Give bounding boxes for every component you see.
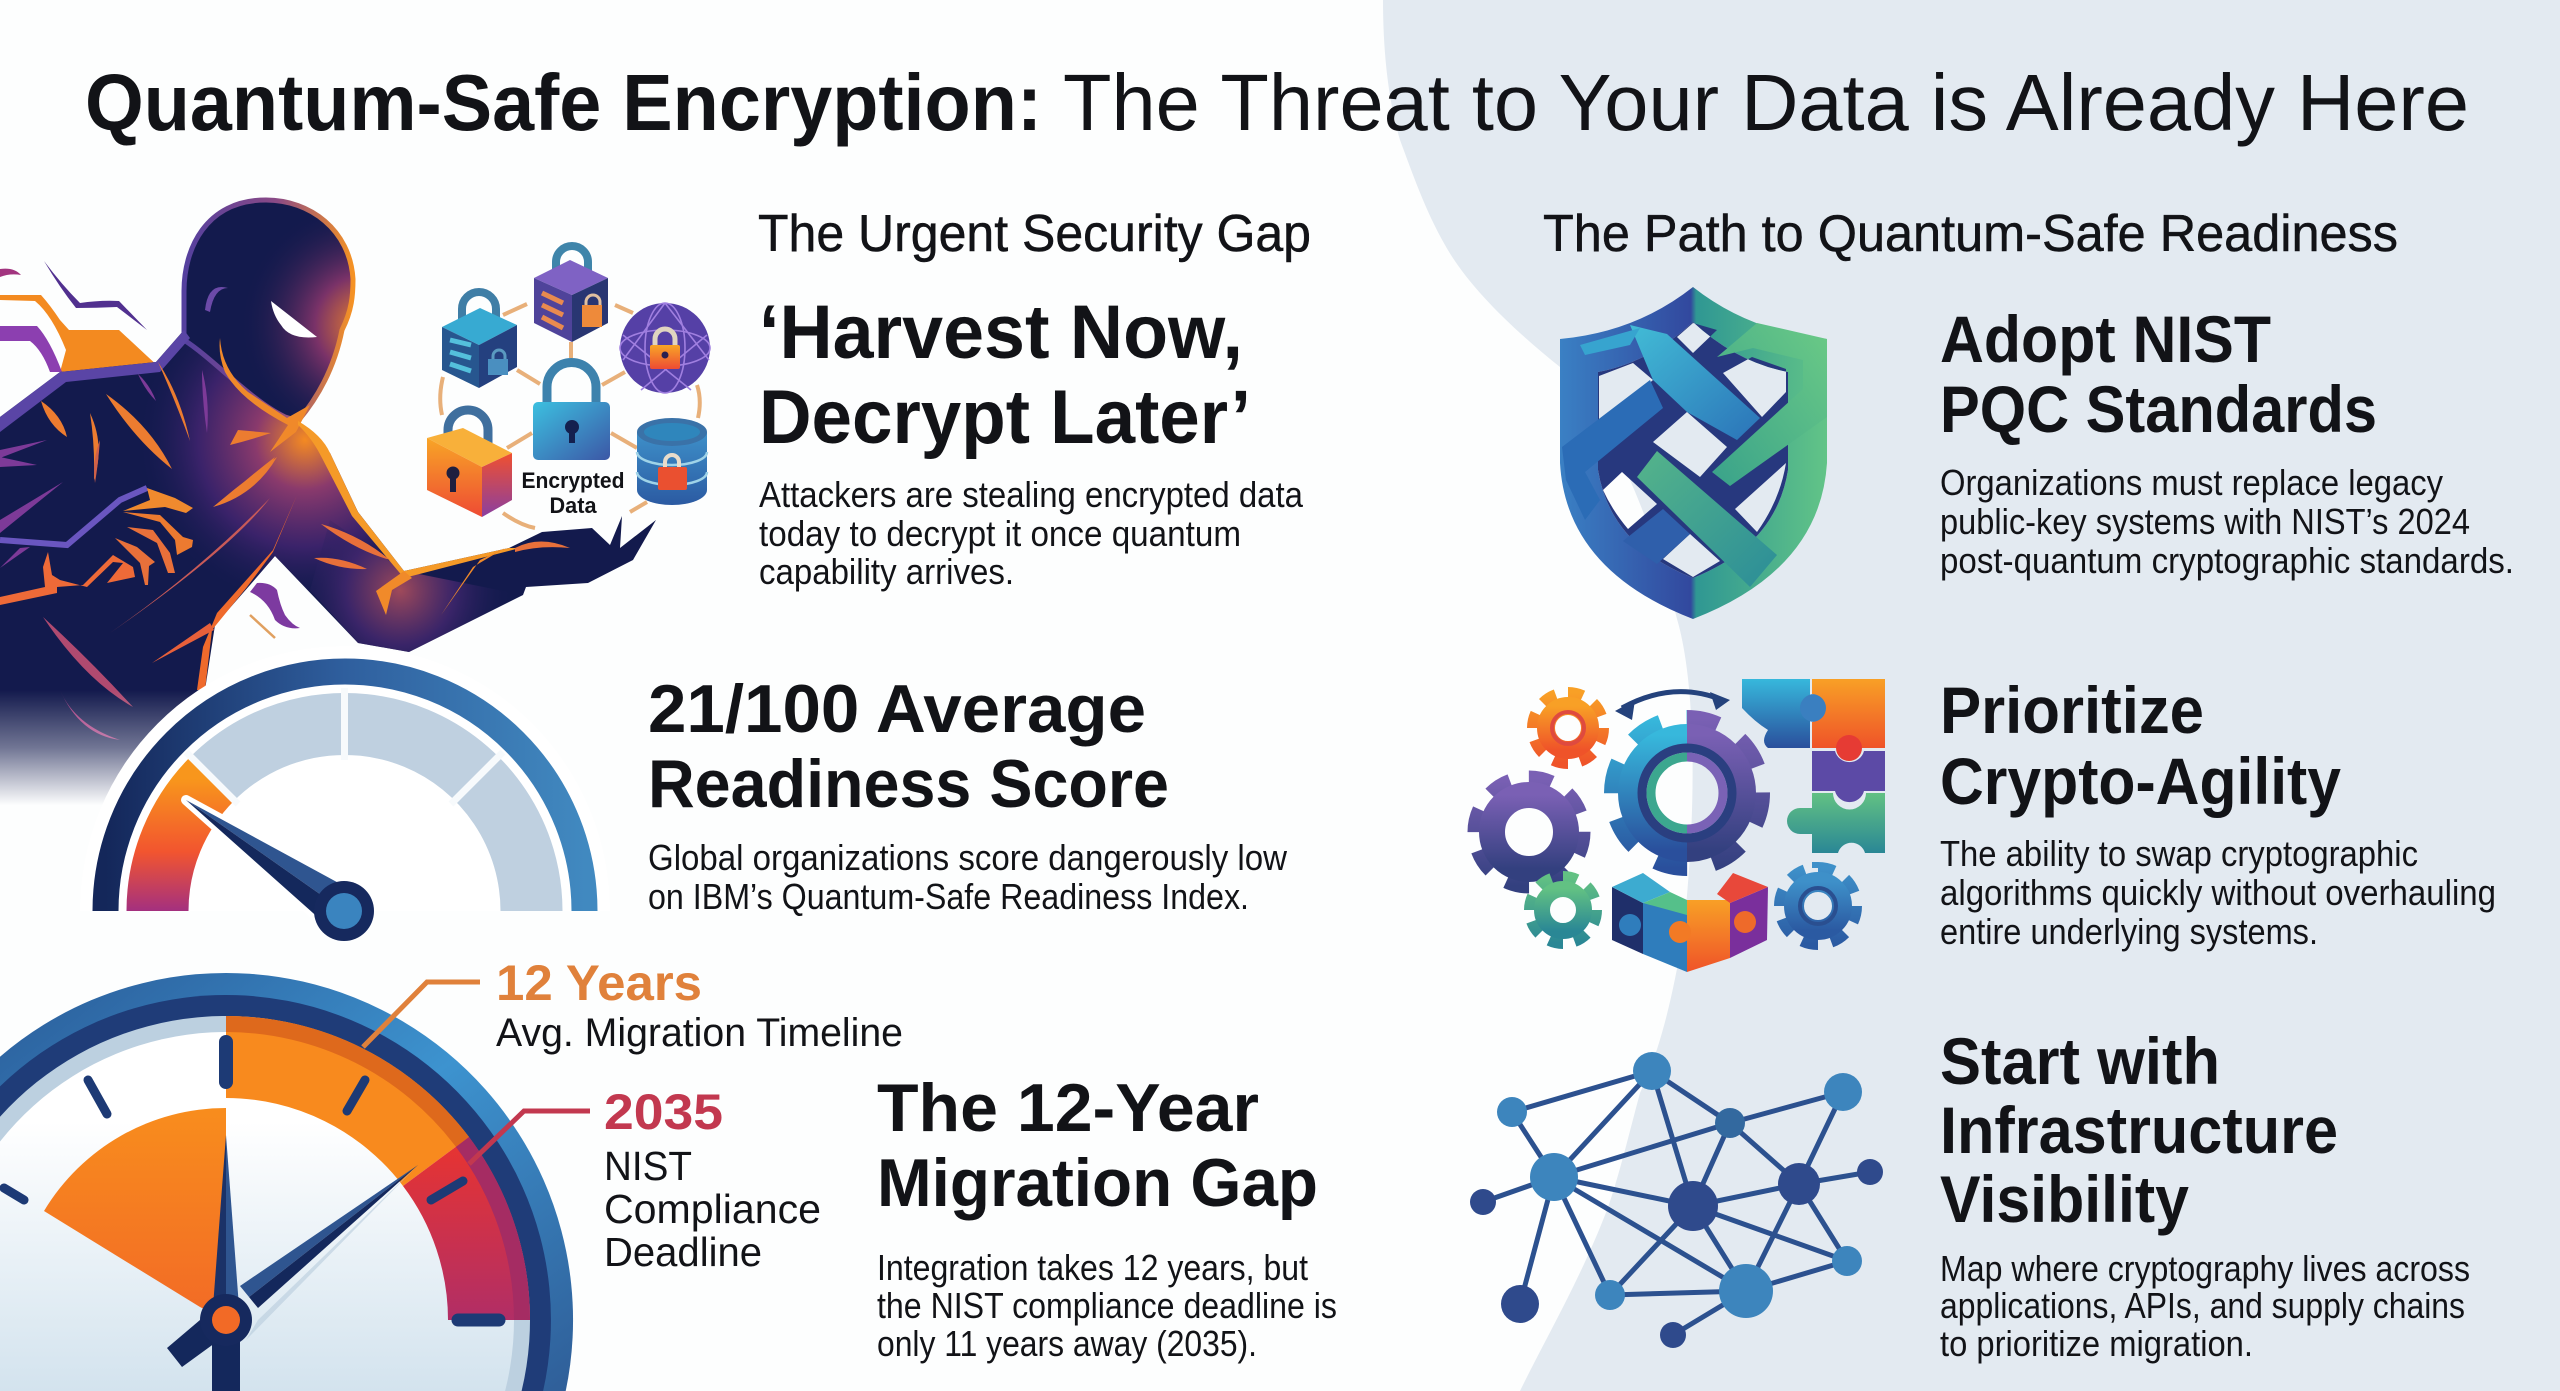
chart: readiness gauge xyxy=(80,646,610,941)
block: 12-year migration gap: the NIST compliance deadline is xyxy=(877,1285,1337,1326)
puzzle pieces xyxy=(1742,679,1885,853)
block: 12-year migration gap xyxy=(877,1070,1337,1364)
chart: migration clock xyxy=(0,973,573,1391)
orange band: 12 years xyxy=(226,1016,469,1186)
blue gear xyxy=(1780,868,1856,944)
callout: 12 years: 12 Years xyxy=(496,955,702,1011)
globe lock xyxy=(620,303,710,393)
heading: path to readiness: The Path to Quantum-Safe Readiness xyxy=(1543,205,2398,263)
callout: 2035: NIST xyxy=(604,1143,692,1189)
3D puzzle xyxy=(1612,873,1768,972)
background panel: right blue-grey wave xyxy=(1383,0,2560,1391)
left forearm and hand xyxy=(0,488,193,605)
block: 12-year migration gap: Integration takes 12 years, but xyxy=(877,1247,1308,1288)
icon: woven shield xyxy=(1560,287,1827,619)
block: infrastructure visibility: Visibility xyxy=(1940,1162,2189,1236)
block: harvest now decrypt later: Attackers are stealing encrypted data xyxy=(759,474,1304,515)
green gear xyxy=(1530,877,1596,943)
block: adopt NIST: Adopt NIST xyxy=(1940,302,2271,376)
body silhouette xyxy=(0,330,656,815)
block: readiness score: on IBM’s Quantum-Safe Readiness Index. xyxy=(648,876,1249,917)
block: adopt NIST: Organizations must replace legacy xyxy=(1940,462,2443,503)
block: infrastructure visibility: Start with xyxy=(1940,1024,2220,1098)
arm and shoulder highlights xyxy=(0,330,570,690)
orange cube lock xyxy=(427,410,512,517)
label: encrypted data: Data xyxy=(550,493,597,518)
block: readiness score xyxy=(648,671,1288,917)
callout: 2035: 2035 xyxy=(604,1084,723,1140)
block: 12-year migration gap: Migration Gap xyxy=(877,1145,1318,1221)
head xyxy=(184,200,353,452)
block: infrastructure visibility xyxy=(1940,1024,2470,1364)
orange wedge xyxy=(44,1108,226,1320)
block: 12-year migration gap: The 12-Year xyxy=(877,1070,1259,1146)
body slashes xyxy=(0,362,277,740)
block: infrastructure visibility: applications, APIs, and supply chains xyxy=(1940,1285,2465,1326)
block: infrastructure visibility: Infrastructure xyxy=(1940,1093,2338,1167)
main gear xyxy=(1612,718,1762,868)
callout: 2035: Compliance xyxy=(604,1186,821,1232)
purple gear xyxy=(1475,778,1583,886)
blue cube lock xyxy=(442,292,517,388)
callout line: 2035 xyxy=(469,1111,590,1164)
fade to white at bottom xyxy=(0,690,260,818)
block: readiness score: Global organizations score dangerously low xyxy=(648,837,1288,878)
block: prioritize crypto-agility xyxy=(1940,673,2496,952)
block: infrastructure visibility: Map where cryptography lives across xyxy=(1940,1248,2470,1289)
title xyxy=(85,58,2469,147)
block: prioritize crypto-agility: entire underlying systems. xyxy=(1940,911,2318,952)
block: prioritize crypto-agility: Crypto-Agility xyxy=(1940,744,2341,818)
clock hands xyxy=(167,1135,418,1391)
block: readiness score: 21/100 Average xyxy=(648,671,1146,747)
callout: 2035 xyxy=(604,1084,821,1275)
icon: network graph xyxy=(1470,1052,1883,1348)
callout: 2035: Deadline xyxy=(604,1229,762,1275)
block: readiness score: Readiness Score xyxy=(648,746,1169,822)
label: encrypted data xyxy=(522,468,624,518)
block: adopt NIST: post-quantum cryptographic standards. xyxy=(1940,540,2514,581)
title: Quantum-Safe Encryption: xyxy=(85,58,1042,147)
block: harvest now decrypt later: capability arrives. xyxy=(759,551,1014,592)
heading: urgent security gap: The Urgent Security Gap xyxy=(758,205,1311,263)
icon cluster: encrypted data locks xyxy=(427,246,710,528)
swap arrow xyxy=(1615,692,1730,720)
icon: gears and puzzle pieces xyxy=(1475,679,1885,972)
block: harvest now decrypt later: ‘Harvest Now, xyxy=(759,290,1243,375)
block: 12-year migration gap: only 11 years away (2035). xyxy=(877,1323,1257,1364)
block: prioritize crypto-agility: Prioritize xyxy=(1940,673,2204,747)
block: prioritize crypto-agility: The ability to swap cryptographic xyxy=(1940,833,2418,874)
gauge needle xyxy=(186,800,374,941)
shield strands xyxy=(1562,323,1827,587)
clock ticks xyxy=(4,1042,499,1320)
callout: 12 years xyxy=(496,955,903,1055)
purple cube lock xyxy=(534,246,608,342)
label: encrypted data: Encrypted xyxy=(522,468,624,493)
illustration: hooded attacker figure xyxy=(0,200,656,818)
block: adopt NIST: PQC Standards xyxy=(1940,372,2377,446)
center blue lock xyxy=(533,362,610,460)
block: prioritize crypto-agility: algorithms quickly without overhauling xyxy=(1940,872,2496,913)
block: harvest now decrypt later: Decrypt Later’ xyxy=(759,375,1251,460)
block: adopt NIST xyxy=(1940,302,2514,581)
block: infrastructure visibility: to prioritize migration. xyxy=(1940,1323,2253,1364)
callout line: 12 years xyxy=(363,982,480,1047)
block: adopt NIST: public-key systems with NIST’s 2024 xyxy=(1940,501,2470,542)
block: harvest now decrypt later xyxy=(759,290,1304,592)
callout: 12 years: Avg. Migration Timeline xyxy=(496,1011,903,1055)
title: The Threat to Your Data is Already Here xyxy=(1063,58,2469,147)
block: harvest now decrypt later: today to decrypt it once quantum xyxy=(759,513,1241,554)
orange gear xyxy=(1533,693,1603,763)
red band: deadline xyxy=(403,1137,530,1320)
database lock xyxy=(637,418,707,505)
